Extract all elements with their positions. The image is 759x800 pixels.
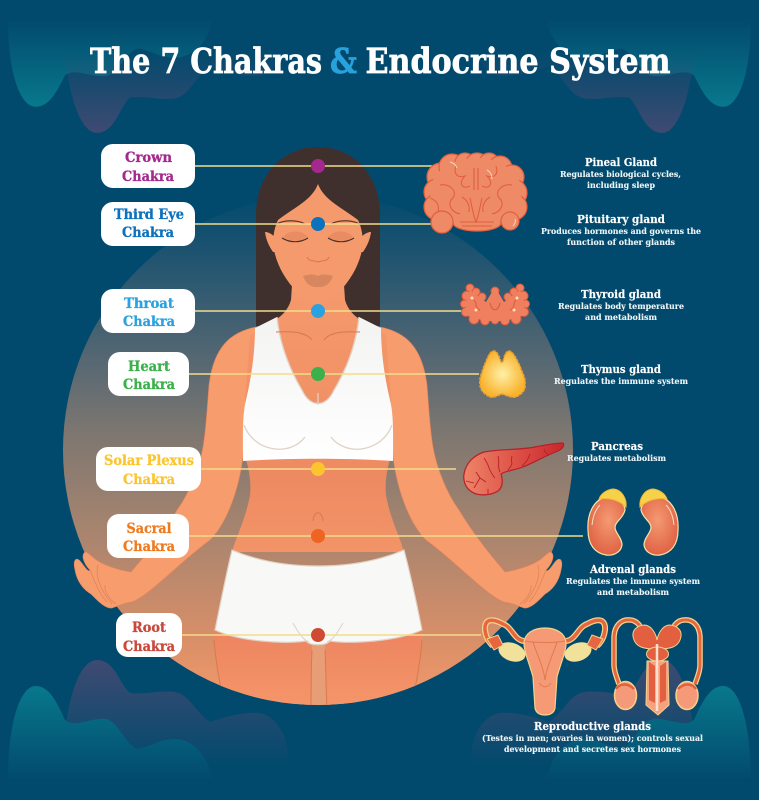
text: pineal gland: including sleep: [587, 181, 655, 191]
background blobs top left purple: [62, 4, 288, 133]
text: pancreas: [567, 440, 666, 464]
label root chakra: [116, 613, 182, 657]
chakra dot crown: [311, 159, 325, 173]
icon: female reproductive organs: [485, 620, 605, 715]
shorts crease: [293, 623, 343, 642]
background blobs top left: [8, 20, 212, 107]
belly button: [313, 513, 323, 521]
label sacral chakra: Chakra: [123, 539, 175, 555]
label throat chakra: Chakra: [123, 314, 175, 330]
hair: [256, 147, 380, 326]
chakra dot throat: [311, 304, 325, 318]
background blobs bottom left: [8, 660, 288, 780]
text: pituitary gland: Pituitary gland: [577, 213, 665, 226]
icon: brain: [424, 153, 527, 233]
ears: [265, 232, 371, 252]
left arm: [74, 327, 256, 608]
text: thyroid gland: Thyroid gland: [581, 288, 661, 301]
text: adrenal glands: Adrenal glands: [589, 563, 676, 576]
label sacral chakra: Sacral: [126, 521, 172, 537]
text: reproductive glands: Reproductive glands: [534, 720, 651, 733]
text: thymus gland: Regulates the immune system: [554, 377, 688, 387]
icon: thyroid: [460, 284, 530, 325]
text: pituitary gland: function of other glands: [567, 238, 675, 248]
text: pineal gland: [560, 156, 681, 191]
chakra dot sacral: [311, 529, 325, 543]
chakra dot root: [311, 628, 325, 642]
text: pituitary gland: Produces hormones and governs the: [541, 227, 702, 237]
background blobs top right purple: [471, 4, 697, 133]
title: The 7 Chakras: [90, 41, 322, 82]
hand creases: [90, 565, 546, 604]
label solar plexus chakra: Chakra: [123, 472, 175, 488]
label heart chakra: Chakra: [123, 377, 175, 393]
title: [90, 41, 670, 82]
label third eye chakra: [101, 202, 195, 246]
woman figure: [74, 147, 562, 712]
title: &: [330, 41, 357, 82]
label crown chakra: Crown: [125, 150, 172, 166]
chakra dot third eye: [311, 217, 325, 231]
text: thymus gland: Thymus gland: [581, 363, 661, 376]
text: pineal gland: Regulates biological cycles,: [560, 170, 681, 180]
right arm: [380, 327, 562, 608]
text: thymus gland: [554, 363, 688, 387]
label third eye chakra: Third Eye: [114, 207, 184, 223]
label sacral chakra: [107, 514, 189, 558]
label heart chakra: [108, 352, 189, 396]
top: [243, 317, 393, 461]
chakra dot heart: [311, 367, 325, 381]
label root chakra: Root: [132, 620, 166, 636]
neckline and cup lines: [244, 317, 392, 449]
collarbones: [276, 332, 360, 340]
label solar plexus chakra: [96, 447, 201, 491]
face: [273, 184, 363, 304]
torso: [232, 285, 404, 552]
label throat chakra: [101, 289, 195, 333]
text: adrenal glands: and metabolism: [597, 588, 669, 598]
background blobs bottom right: [471, 660, 751, 780]
lips: [303, 274, 333, 287]
text: reproductive glands: development and secretes sex hormones: [504, 745, 681, 755]
label root chakra: Chakra: [123, 639, 175, 655]
icon: pancreas: [464, 443, 564, 495]
shorts: [215, 550, 422, 645]
text: reproductive glands: (Testes in men; ovaries in women); controls sexual: [482, 733, 704, 744]
text: thyroid gland: Regulates body temperature: [558, 302, 685, 312]
label solar plexus chakra: Solar Plexus: [104, 453, 194, 469]
text: pancreas: Regulates metabolism: [567, 454, 666, 464]
icon: adrenal glands and kidney right: [640, 489, 678, 555]
text: thyroid gland: [558, 288, 685, 323]
eyes closed: [282, 238, 354, 242]
label crown chakra: Chakra: [122, 169, 174, 185]
label third eye chakra: Chakra: [122, 225, 174, 241]
icon: male reproductive organs: [614, 620, 700, 715]
text: pancreas: Pancreas: [591, 440, 643, 453]
label throat chakra: Throat: [124, 296, 174, 312]
eyebrows: [275, 221, 361, 225]
nose: [307, 257, 329, 262]
text: thyroid gland: and metabolism: [585, 313, 657, 323]
icon: adrenal glands and kidney left: [588, 489, 626, 555]
label heart chakra: Heart: [128, 359, 170, 375]
title: Endocrine System: [366, 41, 670, 82]
connector lines: [182, 166, 583, 635]
text: reproductive glands: [482, 720, 704, 755]
text: pituitary gland: [541, 213, 702, 248]
text: adrenal glands: Regulates the immune system: [566, 577, 700, 587]
eyelids: [283, 231, 353, 241]
chakra dot solar plexus: [311, 462, 325, 476]
icon: thymus: [480, 351, 525, 397]
text: pineal gland: Pineal Gland: [585, 156, 657, 169]
label crown chakra: [101, 144, 195, 188]
legs: [214, 630, 422, 712]
text: adrenal glands: [566, 563, 700, 598]
gradient circle: [63, 195, 573, 705]
background blobs top right: [547, 20, 751, 107]
